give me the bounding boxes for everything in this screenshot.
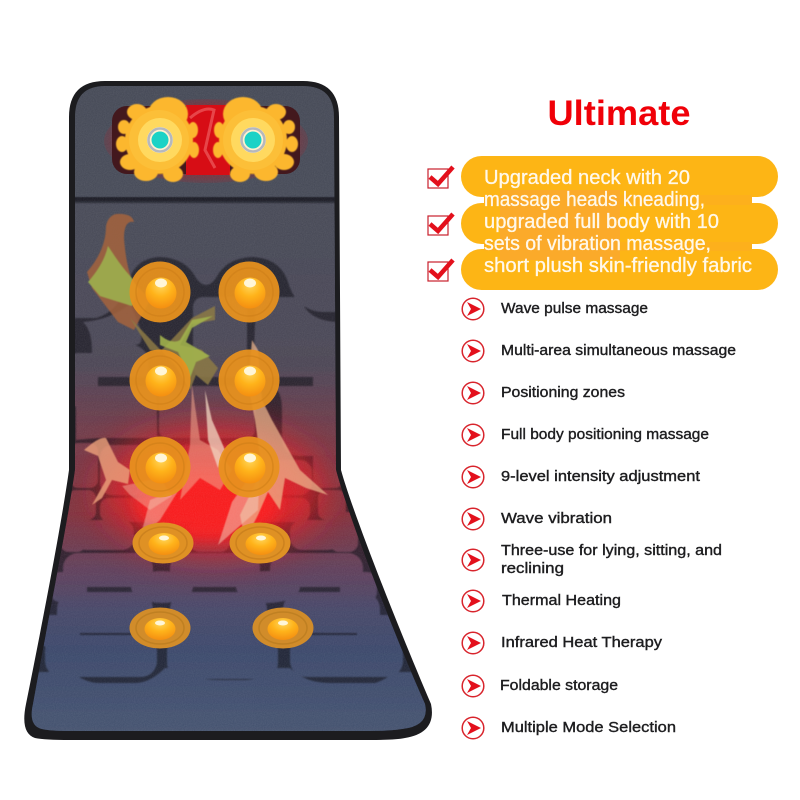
mat black frame [24,81,432,740]
feature: full body: Full body positioning massage [501,427,709,443]
feature: multi-area: Multi-area simultaneous massage [501,343,736,359]
feature: intensity [462,466,700,488]
check box 3 [428,260,453,281]
node row 4 left [132,522,194,564]
feature list [462,298,736,739]
feature: infrared [462,632,663,654]
feature: mode selection [462,717,676,739]
highlight text: short plush skin-friendly fabric [484,255,752,277]
feature: mode selection: Multiple Mode Selection [501,720,676,736]
neck pillow seam [72,197,338,201]
feature: wave pulse [462,298,648,320]
feature: thermal heating: Thermal Heating [502,593,621,609]
feature: three-use [462,543,722,577]
heat flames [84,214,328,545]
mat fabric surface [25,85,440,740]
highlight text: upgraded full body with 10 [484,211,719,233]
highlight text: massage heads kneading, [484,189,705,211]
feature: foldable: Foldable storage [500,678,618,694]
cushion tiles [25,203,440,740]
node row 2 right [218,350,280,410]
highlight text [484,167,752,277]
feature: infrared: Infrared Heat Therapy [501,635,663,651]
neck massage slot [104,99,308,183]
highlight text: sets of vibration massage, [484,233,711,255]
massage mat product [24,81,440,740]
highlight panel [428,156,778,290]
feature: positioning zones [462,382,625,404]
feature: foldable [462,675,618,697]
node row 3 left [130,436,190,498]
node row 5 right [252,608,314,648]
neck massage head left [116,97,199,182]
check box 2 [428,214,453,235]
feature: multi-area [462,340,736,362]
node row 1 left [130,262,190,322]
feature: three-use: reclining [501,561,564,577]
feature: wave pulse: Wave pulse massage [501,301,648,317]
heat glow [102,428,326,552]
highlight text: Upgraded neck with 20 [484,167,690,189]
feature: thermal heating [462,590,621,612]
neck massage head right [213,97,298,182]
feature: positioning zones: Positioning zones [501,385,625,401]
feature: wave vibration [462,508,612,530]
node row 4 right [230,522,290,564]
feature: intensity: 9-level intensity adjustment [501,469,700,485]
check box 1 [428,167,453,188]
feature: three-use: Three-use for lying, sitting, and [501,543,722,559]
node row 2 left [130,350,190,410]
massage nodes [130,262,314,648]
fabric texture [25,85,435,735]
pill backgrounds [461,156,778,290]
feature: full body [462,424,709,446]
darker seams base [25,199,435,735]
title: Ultimate [548,94,690,133]
node row 1 right [218,262,280,322]
feature: wave vibration: Wave vibration [501,511,612,527]
node row 5 left [130,608,190,648]
node row 3 right [218,436,280,498]
